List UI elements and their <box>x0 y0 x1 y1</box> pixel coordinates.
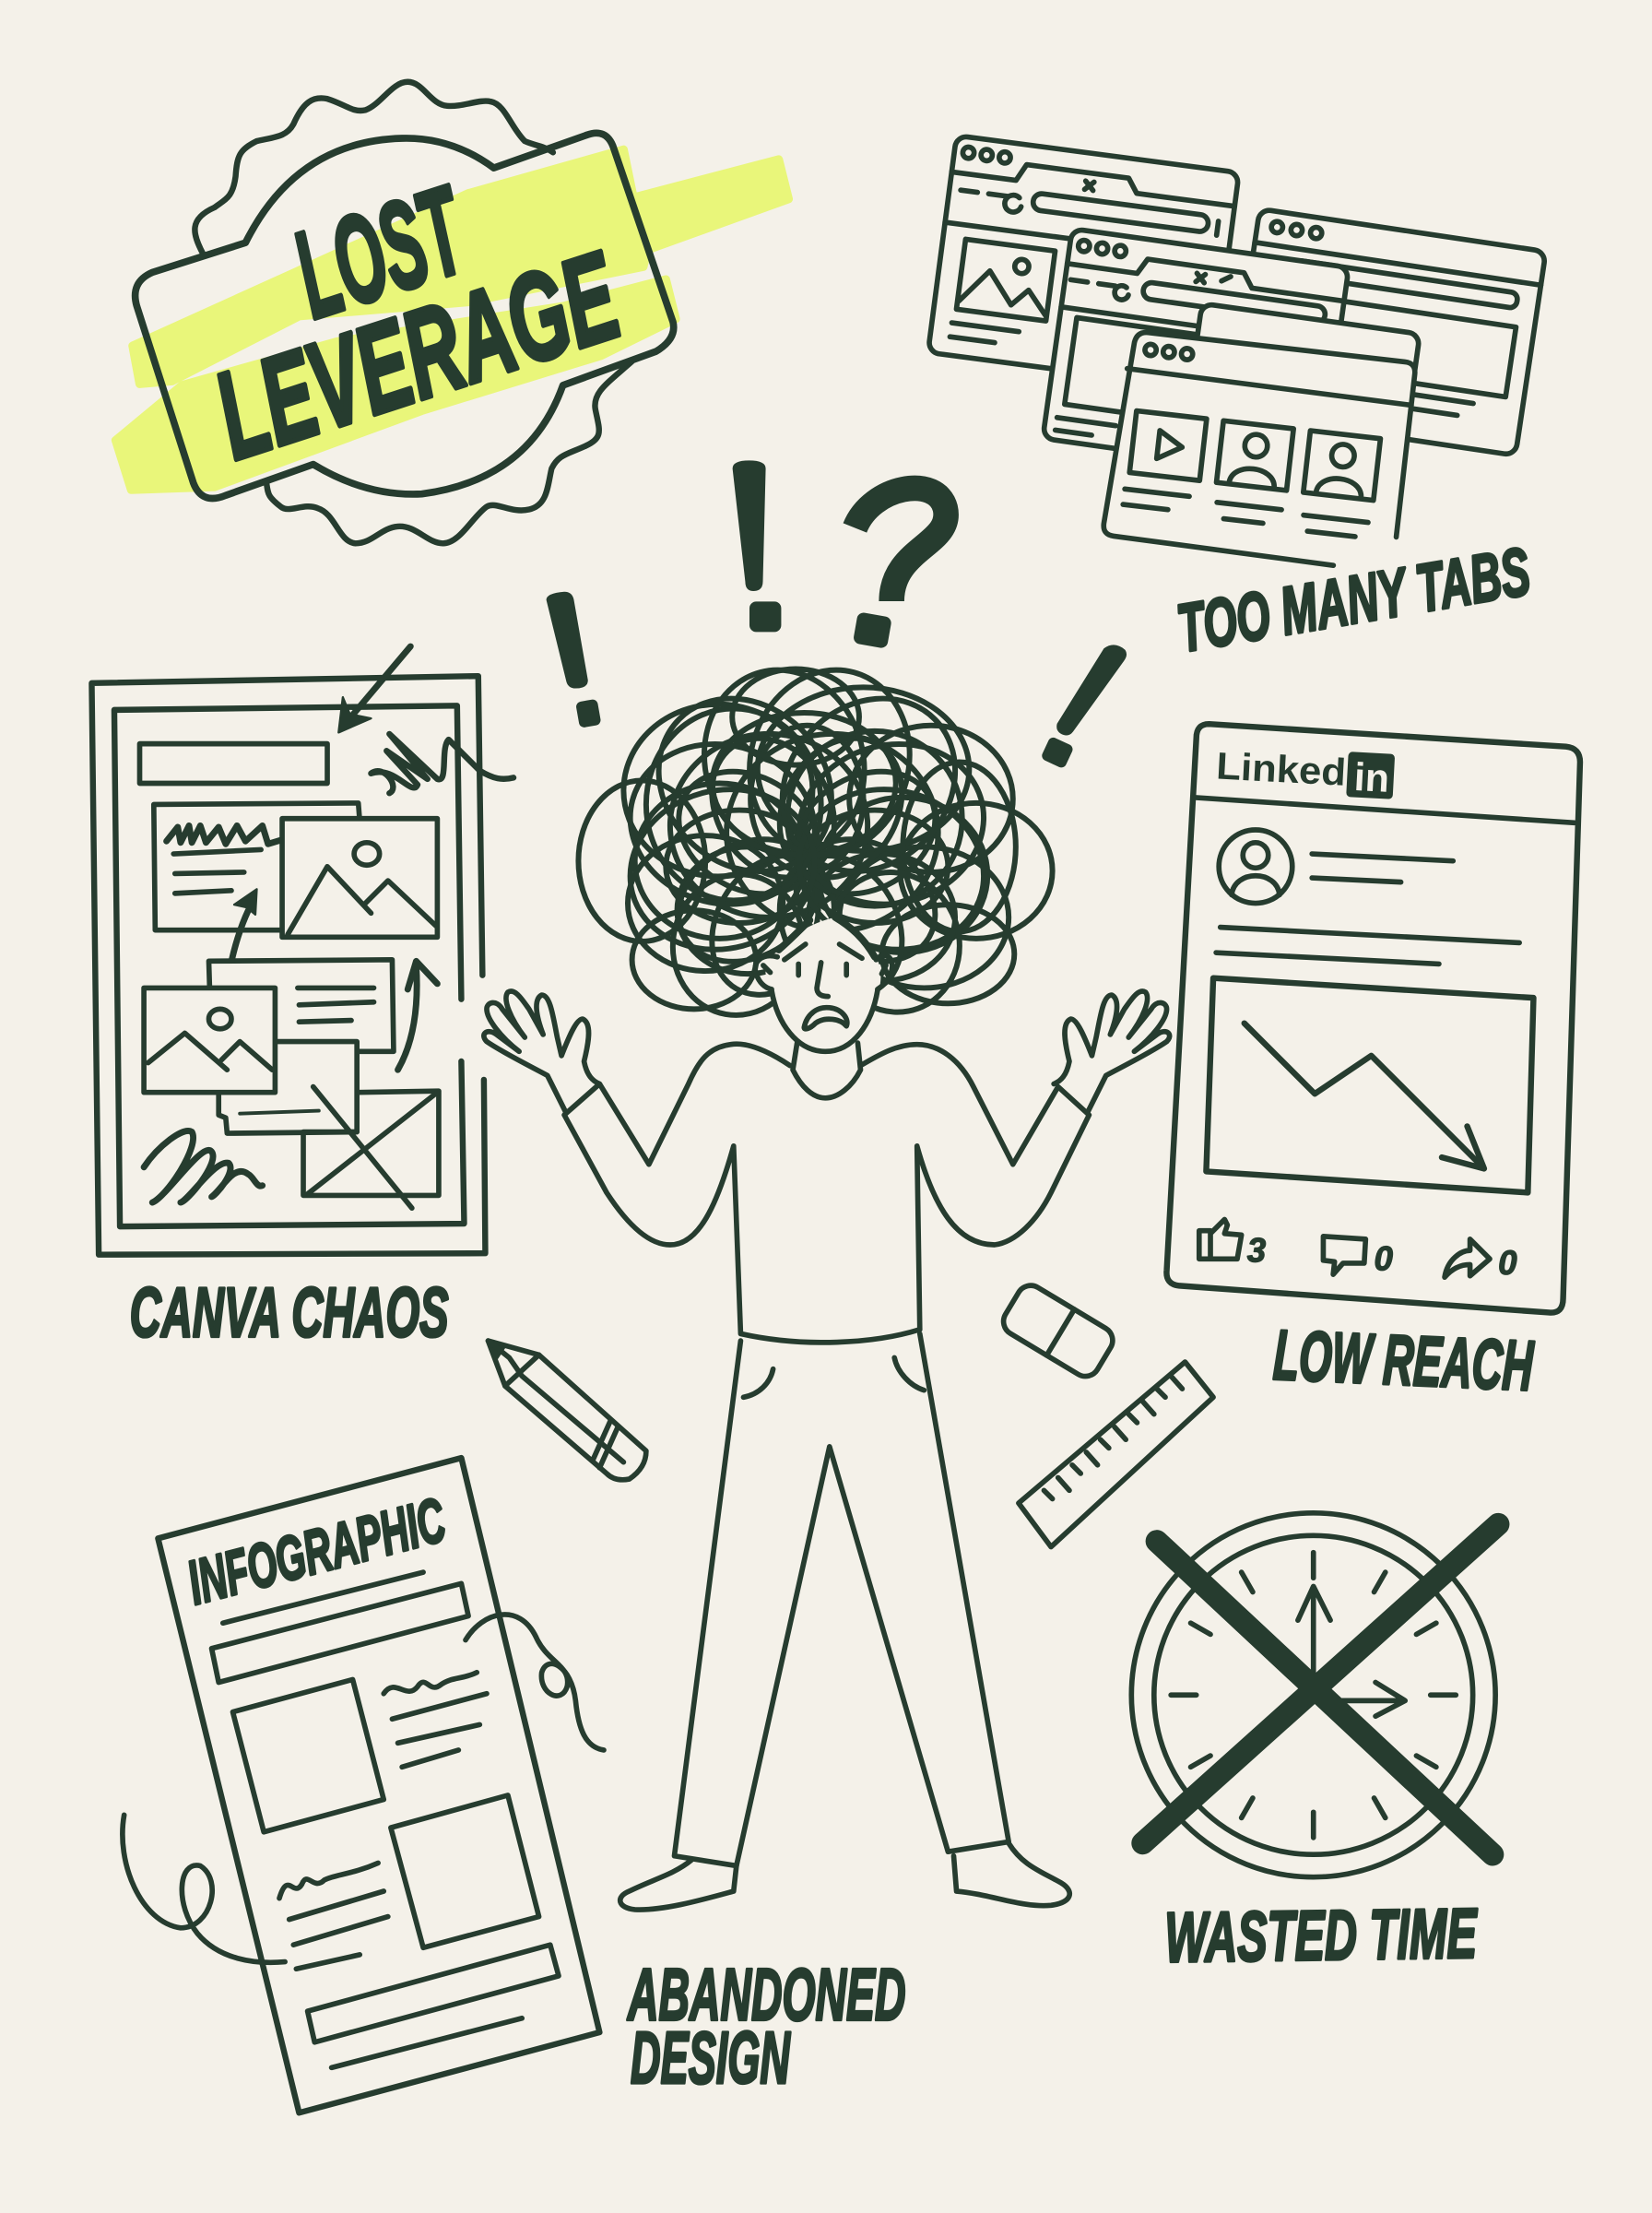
clock face <box>1131 1513 1495 1877</box>
window middle <box>1043 229 1349 477</box>
icon: video thumbnail <box>1129 411 1207 480</box>
scribble top right <box>371 734 513 793</box>
squiggle left <box>123 1815 285 1962</box>
trousers <box>674 1333 1009 1865</box>
panel: too many tabs <box>928 136 1546 667</box>
image placeholder one <box>233 1679 384 1832</box>
linkedin card <box>1166 724 1580 1313</box>
document heading: INFOGRAPHIC <box>181 1485 453 1618</box>
icon: eraser <box>998 1280 1118 1381</box>
label: abandoned design <box>627 1953 905 2099</box>
document sheet <box>158 1458 599 2112</box>
scalloped seal outer edge <box>195 82 632 543</box>
crossed out x <box>1143 1524 1498 1854</box>
icon: share <box>1445 1239 1517 1282</box>
neck <box>793 1043 860 1098</box>
panel: canva chaos <box>91 646 513 1352</box>
footer bar <box>308 1945 559 2042</box>
text column one <box>384 1673 487 1767</box>
right hand <box>1054 991 1170 1112</box>
linkedin logo: in <box>1353 755 1390 801</box>
curved arrow <box>398 961 437 1070</box>
highlighter strokes <box>115 149 788 490</box>
page outer frame <box>91 676 485 1255</box>
icon: exclamation right <box>1042 646 1126 768</box>
label: canva chaos: CANVA CHAOS <box>130 1273 449 1352</box>
icon: person thumbnail two <box>1304 431 1380 501</box>
icon: person thumbnail one <box>1217 420 1293 491</box>
icon: exclamation middle <box>734 462 780 631</box>
icon: like <box>1199 1219 1267 1269</box>
panel: wasted time <box>1131 1513 1498 1978</box>
icon: ruler <box>1019 1362 1213 1547</box>
torso and sleeves <box>564 1044 1089 1343</box>
window back left <box>928 136 1239 390</box>
window behind front <box>1173 303 1420 544</box>
panel: abandoned design <box>123 1458 905 2112</box>
right shoe <box>953 1843 1069 1906</box>
scribble bottom <box>144 1130 263 1202</box>
left shoe <box>620 1860 737 1910</box>
icon: question mark <box>854 488 946 647</box>
text card two <box>208 960 394 1051</box>
icon: like: 3 <box>1247 1231 1267 1269</box>
post text lines <box>1216 854 1519 964</box>
header divider <box>1194 798 1575 822</box>
icon: comment: 0 <box>1375 1240 1394 1278</box>
page inner frame <box>114 705 464 1226</box>
window front with media <box>1102 330 1416 574</box>
window back right <box>1230 209 1546 456</box>
linkedin logo: Linked <box>1215 744 1347 794</box>
icon: share: 0 <box>1498 1244 1517 1282</box>
arrow up <box>230 889 257 968</box>
text card one <box>154 803 360 930</box>
icon: comment <box>1323 1237 1394 1278</box>
icon: exclamation left <box>548 593 600 727</box>
image placeholder two <box>391 1795 539 1947</box>
title text line two: LEVERAGE <box>199 225 636 486</box>
image card one <box>282 819 437 937</box>
heading rule <box>223 1572 423 1623</box>
squiggle right <box>466 1615 604 1750</box>
avatar <box>1219 830 1292 904</box>
top arrow <box>338 646 410 732</box>
panel: low reach <box>1166 724 1580 1406</box>
footer rule <box>332 2018 522 2067</box>
crossed image placeholder <box>303 1087 439 1208</box>
title badge: lost leverage <box>115 82 788 543</box>
tangled hair <box>578 652 1053 1031</box>
title text: LOST <box>278 160 484 345</box>
left hand <box>484 991 599 1112</box>
face <box>755 917 892 1051</box>
top header box <box>140 744 327 783</box>
central figure <box>484 652 1170 1910</box>
label: abandoned design: DESIGN <box>631 2017 791 2099</box>
text column two <box>279 1863 388 1969</box>
declining chart <box>1206 978 1533 1192</box>
label: abandoned design: ABANDONED <box>627 1953 905 2035</box>
label: wasted time: WASTED TIME <box>1164 1895 1479 1978</box>
linkedin logo <box>1215 744 1395 801</box>
header bar <box>212 1583 468 1682</box>
text card three <box>218 1042 357 1133</box>
image card two <box>144 988 275 1093</box>
icon: pencil <box>488 1341 646 1480</box>
banner and inner ring <box>136 133 674 499</box>
